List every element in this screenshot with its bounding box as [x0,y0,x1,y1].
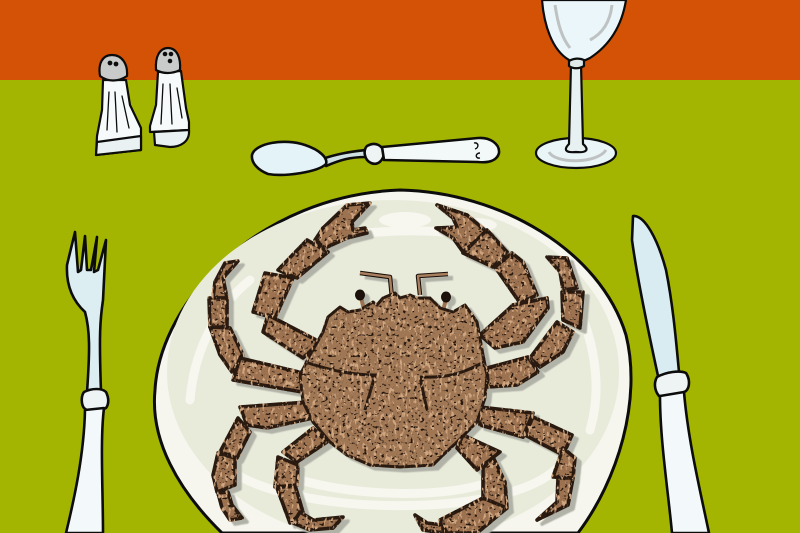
icon: knife [632,216,709,533]
icon: fork [66,232,108,533]
icon: wine glass [536,0,626,168]
icon: pepper shaker [150,48,189,147]
crab shell [300,293,487,467]
crab legs and claws [209,203,583,533]
crab antennae and eyes [356,273,450,312]
background: orange wall [0,0,800,80]
plate [154,190,631,533]
crab [209,203,583,533]
icon: spoon [252,138,499,175]
icon: salt shaker [96,55,141,155]
